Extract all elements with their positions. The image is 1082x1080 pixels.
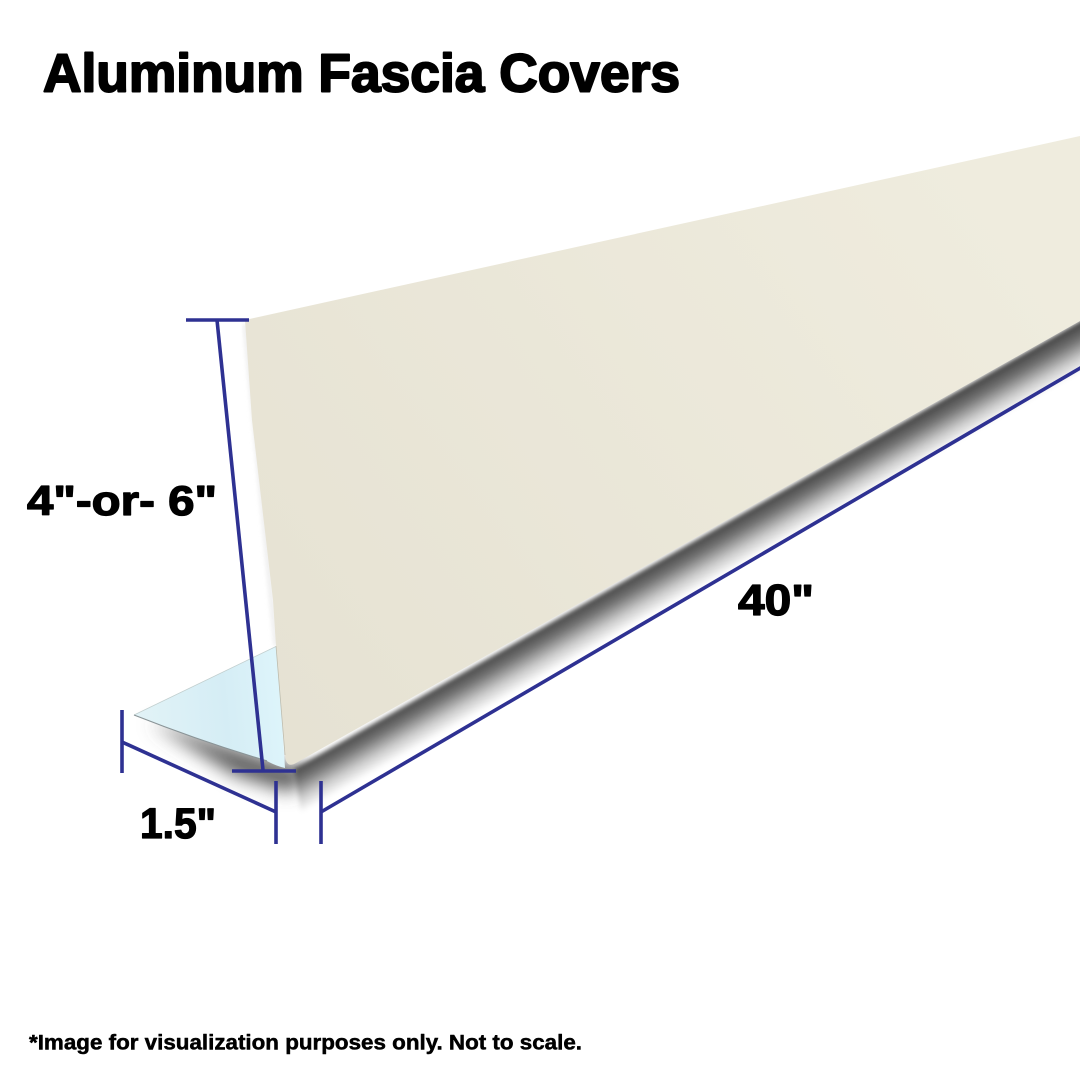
front face: [245, 136, 1080, 765]
base flange: [134, 646, 285, 768]
flange bottom edge: [134, 715, 267, 761]
length dimension: [321, 367, 1082, 844]
side glow: [245, 324, 276, 646]
dimension lines: [122, 320, 1082, 844]
label: width: 1.5": [140, 800, 216, 848]
footnote: *Image for visualization purposes only. Not to scale.: [29, 1032, 582, 1054]
face lower edge: [276, 646, 285, 755]
flange top edge: [134, 646, 277, 715]
title: Aluminum Fascia Covers: [43, 44, 680, 104]
label: height: 4"-or- 6": [27, 477, 217, 524]
main shadow: [294, 310, 1082, 820]
fascia cover product: [134, 136, 1082, 820]
label: length: 40": [738, 576, 814, 625]
height dimension: [186, 320, 296, 771]
flange shadow: [150, 722, 318, 792]
width dimension: [122, 710, 276, 844]
